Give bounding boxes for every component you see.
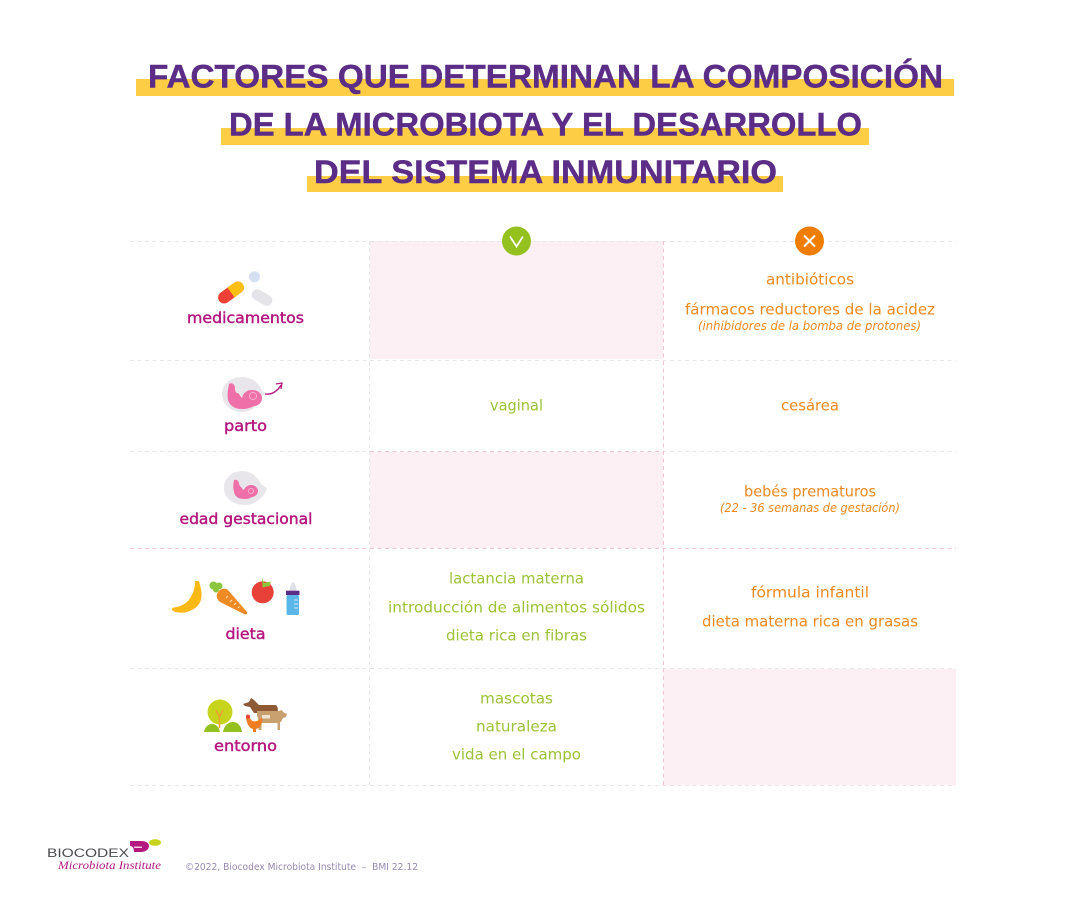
row: edad gestacional (180, 471, 312, 528)
row: parto (222, 377, 282, 435)
label: entorno: entorno (214, 737, 277, 755)
label: edad gestacional: edad gestacional (180, 510, 312, 528)
logo: Biocodex Microbiota Institute: Microbiota Institute (57, 858, 162, 872)
column: favourable factors: mascotas (480, 689, 553, 707)
icon: small fetus (224, 471, 267, 505)
row: entorno (204, 698, 287, 755)
logo: Biocodex Microbiota Institute (47, 839, 162, 872)
column: favourable factors (388, 396, 645, 763)
column: unfavourable factors: fármacos reductores de la acidez (685, 300, 935, 318)
label: parto: parto (224, 417, 267, 435)
icon: tree (204, 700, 242, 732)
column: favourable factors: vaginal (490, 396, 543, 414)
icon: carrot (210, 582, 247, 614)
table: pink empty cells and grid (130, 241, 956, 786)
icon: baby bottle (286, 582, 300, 615)
title: DEL SISTEMA INMUNITARIO (314, 154, 777, 190)
icon: banana (172, 581, 202, 613)
column: unfavourable factors: antibióticos (766, 270, 854, 288)
label: dieta: dieta (226, 625, 266, 643)
label: medicamentos: medicamentos (187, 309, 304, 327)
icon: pills (216, 271, 274, 308)
column: unfavourable factors: (inhibidores de la bomba de protones) (698, 318, 921, 333)
icon: apple (252, 578, 274, 603)
column: unfavourable factors: cesárea (781, 396, 839, 414)
icon: check header (502, 226, 531, 256)
title (136, 58, 954, 192)
column: unfavourable factors: (22 - 36 semanas de gestación) (720, 500, 900, 515)
column: favourable factors: dieta rica en fibras (446, 626, 587, 644)
column: favourable factors: naturaleza (476, 717, 557, 735)
icon: cross header (795, 226, 824, 256)
column: unfavourable factors: fórmula infantil (751, 583, 869, 601)
row: dieta (172, 578, 300, 643)
column: unfavourable factors: dieta materna rica en grasas (702, 612, 918, 630)
column: favourable factors: vida en el campo (452, 745, 581, 763)
footer credit: ©2022, Biocodex Microbiota Institute – BMI 22.12 (185, 862, 418, 873)
column: unfavourable factors: bebés prematuros (744, 482, 876, 500)
icon: fetus with arrow (222, 377, 282, 412)
logo: Biocodex Microbiota Institute: BIOCODEX (47, 848, 129, 860)
column: unfavourable factors (685, 270, 935, 630)
icon: farm animals (243, 698, 287, 732)
column: favourable factors: introducción de alimentos sólidos (388, 598, 645, 616)
row: medicamentos (187, 271, 304, 327)
column: favourable factors: lactancia materna (449, 569, 584, 587)
title: FACTORES QUE DETERMINAN LA COMPOSICIÓN (148, 58, 943, 94)
title: DE LA MICROBIOTA Y EL DESARROLLO (229, 106, 862, 142)
